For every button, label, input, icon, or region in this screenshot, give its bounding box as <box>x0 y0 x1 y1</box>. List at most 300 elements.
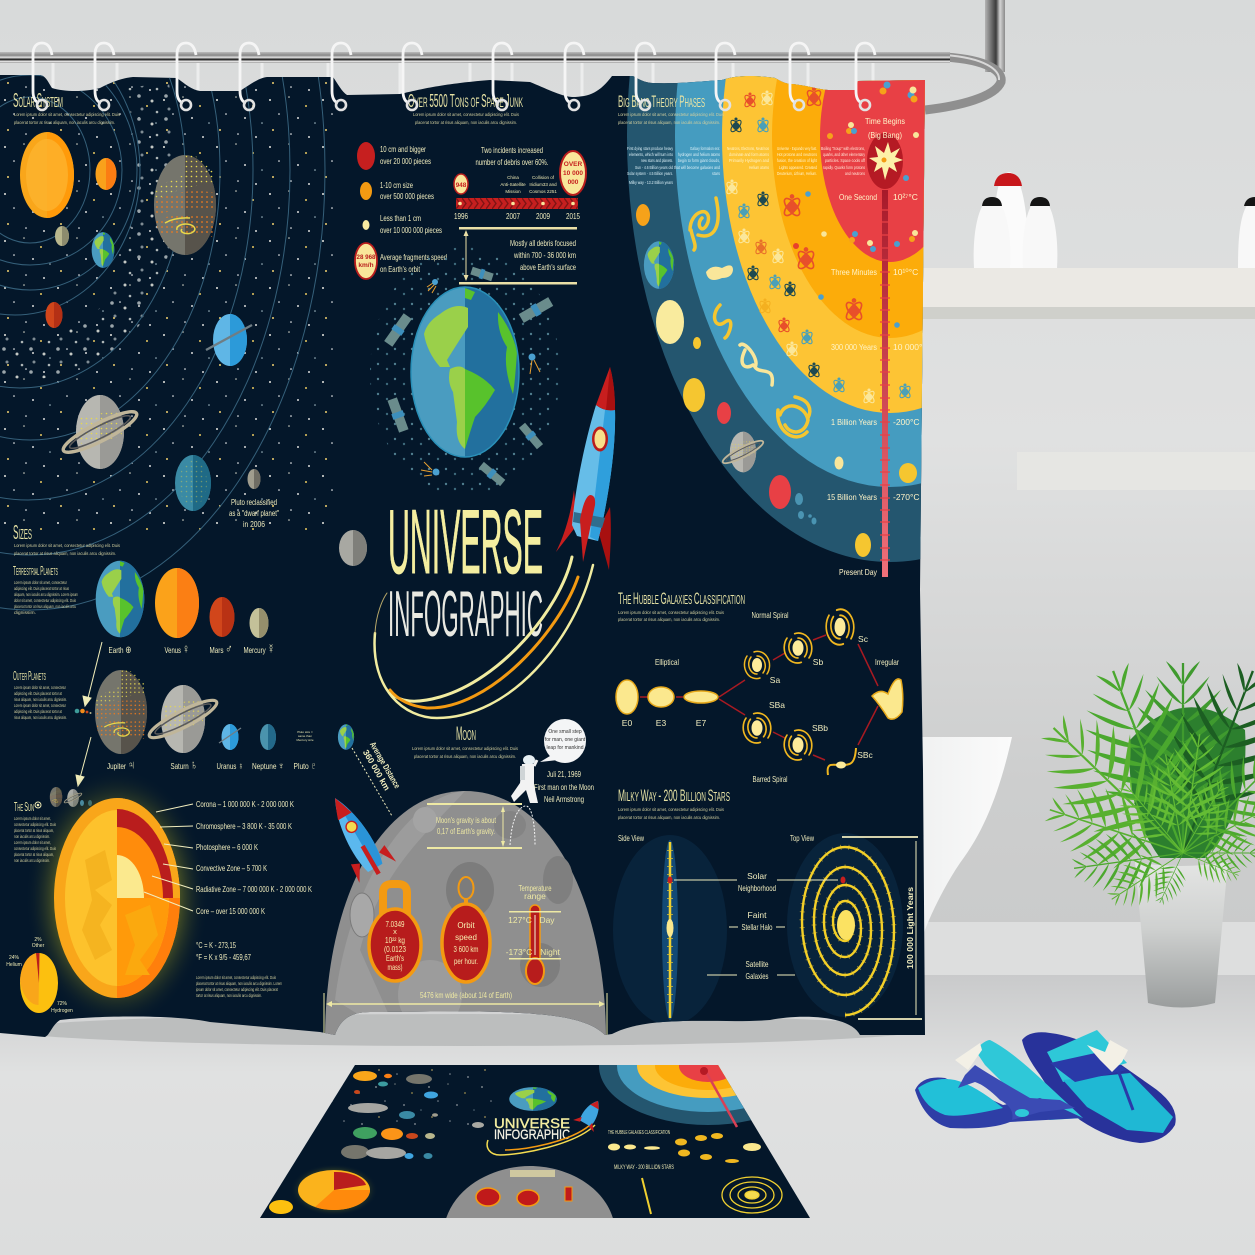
stopwatch: orbit speed <box>442 877 490 982</box>
speech bubble <box>540 719 586 763</box>
planet size: mars <box>210 597 234 637</box>
intro text: space junk: placerat tortor at risus aliquam, non iaculis arcu dignissim. <box>415 120 517 125</box>
hubble labels: E3 <box>656 718 666 728</box>
lower wall shelf <box>1017 452 1255 490</box>
badge: fragment speed: on Earth's orbit <box>380 264 420 274</box>
hubble labels: Elliptical <box>655 657 679 667</box>
timeline labels: 15 Billion Years <box>827 492 877 502</box>
debris altitude bracket: within 700 - 36 000 km <box>513 250 576 260</box>
intro text: big bang <box>618 112 725 125</box>
timeline: debris growth: 2007 <box>506 211 520 221</box>
era descriptions: Galaxy formation era: <box>690 146 720 151</box>
mat: moon <box>445 1166 614 1222</box>
leader lines: sun layers <box>144 804 193 911</box>
era descriptions: Helium atoms <box>749 165 770 170</box>
heading: the sun: THE SUN <box>14 799 34 814</box>
intro text: moon <box>412 746 519 759</box>
labels: outer planets <box>107 762 315 770</box>
concentric era rings <box>627 0 1153 562</box>
distance label: 360 000 km <box>361 748 392 793</box>
text: sun notes: ipsum dolor sit amet, consectetur adipiscing elit. Duis placerat <box>196 987 278 992</box>
pie chart: sun composition <box>20 953 58 1013</box>
badge: fragment speed: 28 968 <box>356 254 376 261</box>
planet: neptune <box>175 455 211 511</box>
text: sun notes: Lorem ipsum dolor sit amet, consectetur adipiscing elit. Duis <box>196 975 276 980</box>
era descriptions: Deuterium, Lithium, Helium. <box>777 171 817 176</box>
upper wall shelf <box>921 268 1255 319</box>
text: sun description: non iaculis arcu dignissim. <box>14 858 50 863</box>
callout: pluto reclassified <box>229 499 279 527</box>
thermometer: temperature range: Day <box>539 915 555 925</box>
moon landing caption: Juli 21, 1969 <box>547 769 581 779</box>
mat: solar system planets <box>341 1071 438 1159</box>
labels: inner planets <box>109 644 272 654</box>
callout: incidents <box>476 145 548 167</box>
formula: temperature conversion <box>196 940 251 962</box>
scale label: 100 000 Light Years <box>905 887 915 969</box>
timeline labels: 10¹⁰°C <box>893 267 918 277</box>
moon landing caption: Neil Armstrong <box>544 794 584 804</box>
intro text: solar system: placerat tortor at risus aliquam, non iaculis arcu dignissim. <box>14 120 115 125</box>
curtain hooks <box>33 43 875 110</box>
text: terrestrial planets: dolor sit amet, consectetur adipiscing elit. Duis <box>14 598 76 603</box>
intro text: hubble <box>618 610 725 622</box>
timeline: debris growth: Iridium33 and <box>529 182 557 187</box>
panel: milky way <box>613 786 922 1025</box>
labels: sun layers: Chromosphere – 3 800 K - 35 000 K <box>196 821 292 831</box>
hubble labels: E7 <box>696 718 706 728</box>
hubble labels: Barred Spiral <box>752 774 788 784</box>
planet size: venus <box>155 568 199 638</box>
planet: pluto <box>248 469 260 489</box>
distance label: Average Distance <box>368 740 403 790</box>
legend: debris sizes: Less than 1 cm <box>380 213 421 223</box>
orbit lines <box>0 75 326 610</box>
formula: temperature conversion: °F = K x 9/5 - 459,67 <box>196 952 251 962</box>
moon width scale: 5476 km wide (about 1/4 of Earth) <box>420 990 512 1000</box>
galaxy: irregular <box>872 679 903 719</box>
kettlebell: moon mass: (0.0123 <box>384 945 406 954</box>
thermometer: temperature range: range <box>524 891 546 901</box>
astronaut <box>511 755 538 803</box>
curtain tape strips <box>53 63 873 96</box>
debris altitude bracket: Mostly all debris focused <box>510 238 576 248</box>
heading: hubble: THE HUBBLE GALAXIES CLASSIFICATION <box>618 589 745 608</box>
heading: outer planets: OUTER PLANETS <box>13 668 46 683</box>
text: outer planets: Lorem ipsum dolor sit amet, consectetur <box>14 703 66 708</box>
pie labels: Hydrogen <box>51 1008 73 1014</box>
kettlebell: moon mass: x <box>393 927 397 936</box>
timeline labels: 1 Billion Years <box>831 417 877 427</box>
timeline: debris growth: 10 000 <box>563 170 583 177</box>
mat: earth and title: INFOGRAPHIC <box>494 1126 570 1142</box>
galaxy: side view <box>613 835 727 1025</box>
timeline: debris growth: China <box>507 175 519 180</box>
intro text: big bang: Lorem ipsum dolor sit amet, consectetur adipiscing elit. Duis <box>618 112 725 117</box>
note: pluto small: same than <box>298 734 312 738</box>
hubble labels: Sa <box>770 675 780 685</box>
hubble labels: SBc <box>857 750 874 760</box>
potted plant <box>1017 650 1255 1008</box>
timeline: debris growth: Cosmos 2251 <box>529 189 557 194</box>
text: outer planets: risus aliquam, non iaculis arcu dignissim. <box>14 715 67 720</box>
mat: big bang rings <box>599 1007 817 1127</box>
icon: flower ornaments <box>955 1040 1128 1072</box>
intro text: solar system <box>14 112 121 125</box>
labels: sun layers: Convective Zone – 5 700 K <box>196 863 267 873</box>
gravity callout <box>427 803 535 849</box>
labels: sun layers: Photosphere – 6 000 K <box>196 842 258 852</box>
moon landing caption: First man on the Moon <box>534 782 594 792</box>
legend: debris sizes: over 10 000 000 pieces <box>380 225 442 235</box>
labels: outer planets: Neptune ♆ <box>252 761 284 772</box>
hubble labels: SBa <box>769 700 785 710</box>
intro text: milky way: Lorem ipsum dolor sit amet, consectetur adipiscing elit. Duis <box>618 807 725 812</box>
kettlebell: moon mass: mass) <box>388 963 403 972</box>
text: sun description: consectetur adipiscing elit. Duis <box>14 822 56 827</box>
era descriptions: Boiling "Soup" with electrons, <box>821 146 865 151</box>
milky way arrows <box>674 837 922 1019</box>
debris altitude bracket: above Earth's surface <box>520 262 576 272</box>
text: outer planets: risus aliquam, non iaculis arcu dignissim. <box>14 697 67 702</box>
central earth <box>411 287 519 457</box>
kettlebell: moon mass <box>369 884 421 981</box>
badge: fragment speed: km/h <box>358 262 374 269</box>
mat: earth and title <box>472 1087 608 1155</box>
text: sun description: Lorem ipsum dolor sit amet, <box>14 816 51 821</box>
intro text: big bang: placerat tortor at risus aliquam, non iaculis arcu dignissim. <box>618 120 720 125</box>
text: terrestrial planets <box>14 580 78 615</box>
timeline labels: -200°C <box>893 417 920 427</box>
timeline: debris growth: 948 <box>456 182 467 189</box>
timeline labels: (Big Bang) <box>868 130 902 140</box>
intro text: moon: Lorem ipsum dolor sit amet, consectetur adipiscing elit. Duis <box>412 746 519 751</box>
legend: debris sizes: 1-10 cm size <box>380 180 413 190</box>
note: pluto small: Pluto size = <box>297 730 313 734</box>
panel: hubble classification <box>616 589 903 784</box>
milky way labels: Faint <box>748 910 767 920</box>
galaxies: elliptical <box>616 680 718 714</box>
labels: outer planets: Uranus ♁ <box>216 761 244 772</box>
timeline: debris growth: Mission <box>505 189 521 194</box>
text: sun description: non iaculis arcu dignissim. <box>14 834 50 839</box>
text: sun description: Lorem ipsum dolor sit amet, <box>14 840 51 845</box>
gravity callout: Moon's gravity is about <box>436 815 496 825</box>
hubble labels: Normal Spiral <box>752 610 789 620</box>
milky way labels: Galaxies <box>746 971 768 981</box>
era descriptions: Lights appeared. Created <box>779 165 817 170</box>
era descriptions: quarks, and other elementary <box>823 152 866 157</box>
bathtub <box>920 737 1012 938</box>
era descriptions: elements, which will turn into <box>629 152 673 157</box>
legend: debris sizes <box>357 142 442 235</box>
distance arrow <box>352 748 392 816</box>
planet size: earth <box>96 561 144 637</box>
intro text: milky way <box>618 807 725 820</box>
thermometer: temperature range: Temperature <box>518 883 552 893</box>
text: outer planets <box>14 685 67 720</box>
era descriptions: begin to form giant clouds, <box>678 158 720 163</box>
thermometer: temperature range: -173°C <box>506 947 532 957</box>
hubble labels: Irregular <box>875 657 899 667</box>
title: universe infographic <box>388 492 543 650</box>
atoms: nucleosynthesis and atoms eras <box>725 88 912 404</box>
curtain shadow on floor <box>10 1014 920 1046</box>
hubble labels: Sb <box>813 657 823 667</box>
era descriptions: Solar system - 4.5 Billion years. <box>627 171 673 176</box>
mat: hubble and milky way <box>608 1130 782 1214</box>
galaxies: normal spiral <box>744 609 854 679</box>
era descriptions: Neutrons, Electrons, Neutrinos <box>727 146 770 151</box>
pie labels: 24% <box>9 955 20 961</box>
pie labels <box>6 937 73 1014</box>
stopwatch: orbit speed: per hour. <box>454 957 478 966</box>
text: terrestrial planets: adipiscing elit. Duis placerat tortor at risus <box>14 586 69 591</box>
pie labels: Helium <box>6 962 22 968</box>
plant fronds <box>1017 650 1255 920</box>
kettlebell: moon mass: 10²² kg <box>385 936 405 945</box>
intro text: sizes <box>14 543 121 556</box>
planet: earth <box>92 232 114 268</box>
small rocket <box>317 788 397 884</box>
callout: pluto reclassified: Pluto reclassified <box>231 497 277 507</box>
panel: big bang phases <box>618 0 1153 577</box>
icon: sun symbol <box>35 802 41 808</box>
labels: outer planets: Saturn ♄ <box>170 757 198 772</box>
arrow: earth to solar system scale <box>83 642 102 706</box>
planet: mars <box>46 302 62 328</box>
era descriptions: particles. Space cools off <box>825 158 866 163</box>
pie labels: Other <box>32 943 45 949</box>
intro text: space junk <box>413 112 520 125</box>
timeline: debris growth: 1996 <box>454 211 468 221</box>
timeline labels: Present Day <box>839 567 878 577</box>
hubble labels: SBb <box>812 723 828 733</box>
timeline: debris growth: Collision of <box>532 175 555 180</box>
text: terrestrial planets: aliquam, non iaculis arcu dignissim. Lorem ipsum <box>14 592 78 597</box>
era descriptions: dominate and form atoms <box>729 152 770 157</box>
connecting lines <box>640 635 878 760</box>
timeline bar <box>880 190 890 577</box>
satellites <box>383 266 554 487</box>
era descriptions: Sun - 4.6 Billion years old <box>635 165 673 170</box>
era descriptions: Hot protons and neutrons <box>777 152 818 157</box>
panel: sizes <box>13 522 316 807</box>
timeline: debris growth: Anti-Satellite <box>500 182 526 187</box>
labels: inner planets: Mercury ☿ <box>244 641 274 656</box>
legend: debris sizes: 10 cm and bigger <box>380 144 426 154</box>
timeline labels: 300 000 Years <box>831 342 877 352</box>
stopwatch: orbit speed: speed <box>455 933 477 942</box>
rocket <box>556 367 615 570</box>
debris altitude bracket <box>459 227 577 284</box>
speech bubble: for man, one giant <box>545 737 586 743</box>
planet size: mercury <box>250 608 268 638</box>
planet: uranus <box>206 314 252 366</box>
milky way labels <box>618 833 815 981</box>
panel: the sun <box>6 781 312 1013</box>
planet: sun <box>20 132 74 218</box>
back ledge <box>920 922 1255 976</box>
stopwatch: orbit speed: Orbit <box>457 921 475 930</box>
flip flop: right <box>1022 1030 1176 1143</box>
planet size: uranus <box>219 724 241 750</box>
plant pot <box>1135 862 1228 1008</box>
timeline labels: -270°C <box>893 492 920 502</box>
legend: debris sizes: over 500 000 pieces <box>380 191 434 201</box>
galaxy: top view <box>787 833 903 1017</box>
shower curtain: INFOGRAPHIC <box>388 577 543 650</box>
milky way labels: Neighborhood <box>738 883 776 893</box>
hubble labels: Sc <box>858 634 869 644</box>
timeline: debris growth: OVER <box>564 161 583 168</box>
hubble labels <box>622 610 899 784</box>
intro text: sizes: placerat tortor at risus aliquam, non iaculis arcu dignissim. <box>14 551 116 556</box>
distance label <box>359 740 403 795</box>
kettlebell: moon mass: 7.0349 <box>386 920 405 929</box>
era descriptions: new stars and planets. <box>641 158 673 163</box>
era descriptions: rapidly. Quarks form protons <box>823 165 866 170</box>
kettlebell: moon mass: Earth's <box>386 954 404 963</box>
era descriptions: and neutrons <box>845 171 866 176</box>
room wall background <box>0 0 1255 980</box>
gray planet near title <box>339 530 367 566</box>
asteroid belt <box>0 85 155 358</box>
floor <box>0 975 1255 1255</box>
milky way labels: Solar <box>747 871 767 881</box>
heading: terrestrial planets: TERRESTRIAL PLANETS <box>13 563 58 578</box>
gravity callout: 0,17 of Earth's gravity. <box>437 826 495 836</box>
panel: moon <box>317 719 607 1040</box>
callout: pluto reclassified: as a "dwarf planet" <box>229 508 279 518</box>
formula: temperature conversion: °C = K - 273,15 <box>196 940 236 950</box>
timeline labels: 10 000°C <box>893 342 929 352</box>
intro text: moon: placerat tortor at risus aliquam, non iaculis arcu dignissim. <box>414 754 516 759</box>
text: sun description <box>14 816 56 863</box>
planet: venus <box>96 158 117 190</box>
sun glow <box>25 768 209 1028</box>
text: outer planets: adipiscing elit. Duis placerat tortor at <box>14 691 62 696</box>
text: sun notes: tortor at risus aliquam, non iaculis arcu dignissim. <box>196 993 262 998</box>
diagram: sun cross-section <box>54 798 180 998</box>
era descriptions: fusion, the creation of light <box>777 158 818 163</box>
legend: debris sizes: over 20 000 pieces <box>380 156 431 166</box>
intro text: hubble: Lorem ipsum dolor sit amet, consectetur adipiscing elit. Duis <box>618 610 725 615</box>
floor mat <box>250 1007 820 1225</box>
callout: pluto reclassified: in 2006 <box>243 519 265 529</box>
intro text: milky way: placerat tortor at risus aliquam, non iaculis arcu dignissim. <box>618 815 720 820</box>
text: sun notes: placerat tortor at risus aliquam, non iaculis arcu dignissim. Lorem <box>196 981 282 986</box>
planet size: neptune <box>260 724 276 750</box>
stopwatch: orbit speed: 3 600 km <box>454 945 479 954</box>
intro text: hubble: placerat tortor at risus aliquam, non iaculis arcu dignissim. <box>618 617 720 622</box>
timeline: debris growth: 000 <box>568 179 579 186</box>
era descriptions: hydrogen and helium atoms <box>678 152 721 157</box>
era descriptions: stars <box>712 171 721 176</box>
planet: jupiter <box>154 155 216 255</box>
labels: inner planets: Venus ♀ <box>164 641 190 656</box>
era descriptions <box>627 146 866 185</box>
bottles on shelf <box>974 172 1255 268</box>
text: terrestrial planets: Lorem ipsum dolor sit amet, consectetur <box>14 580 67 585</box>
speech bubble: leap for mankind <box>547 745 584 751</box>
intro text: solar system: Lorem ipsum dolor sit amet, consectetur adipiscing elit. Duis <box>14 112 121 117</box>
labels: sun layers: Core – over 15 000 000 K <box>196 906 265 916</box>
text: sun notes <box>196 975 282 998</box>
timeline labels: 10²⁷°C <box>893 192 918 202</box>
era descriptions: Milky way - 13.2 Billion years <box>629 180 674 185</box>
era descriptions: Primarily Hydrogen and <box>729 158 769 163</box>
milky way labels: Satellite <box>746 959 769 969</box>
text: terrestrial planets: dignissim. <box>14 610 36 615</box>
labels: sun layers: Corona – 1 000 000 K - 2 000 000 K <box>196 799 294 809</box>
galaxies: barred spiral <box>743 713 856 775</box>
thermometer: temperature range: Night <box>540 947 561 957</box>
note: pluto small: Mercury size <box>296 738 314 742</box>
labels: outer planets: Jupiter ♃ <box>107 757 135 772</box>
debris dots around earth <box>370 247 560 497</box>
timeline: debris growth: 2009 <box>536 211 550 221</box>
heading: big bang: BIG BANG THEORY PHASES <box>618 92 705 111</box>
intro text: space junk: Lorem ipsum dolor sit amet, consectetur adipiscing elit. Duis <box>413 112 520 117</box>
shower curtain: UNIVERSE <box>388 492 543 593</box>
milky way labels: Stellar Halo <box>742 922 773 932</box>
badge: fragment speed <box>355 243 447 279</box>
heading: space junk: OVER 5500 TONS OF SPACE JUNK <box>408 91 523 111</box>
text: sun description: placerat tortor at risus aliquam, <box>14 828 54 833</box>
panel: moon: MOON <box>456 724 476 745</box>
pie labels: 2% <box>34 937 42 943</box>
swoosh trail under title <box>375 557 593 718</box>
labels: sun layers: Radiative Zone – 7 000 000 K - 2 000 000 K <box>196 884 312 894</box>
callout: incidents: Two incidents increased <box>481 145 543 155</box>
text: sun description: consectetur adipiscing elit. Duis <box>14 846 56 851</box>
text: outer planets: Lorem ipsum dolor sit amet, consectetur <box>14 685 66 690</box>
milky way labels: Top View <box>790 833 815 843</box>
panel: space junk <box>355 91 586 497</box>
text: sun description: placerat tortor at risus aliquam, <box>14 852 54 857</box>
flip flops <box>915 1030 1176 1143</box>
shower curtain <box>0 75 925 1037</box>
labels: sun layers <box>196 799 312 916</box>
heading: milky way: MILKY WAY - 200 BILLION STARS <box>618 786 730 805</box>
hubble labels: E0 <box>622 718 632 728</box>
planet size: saturn <box>146 685 220 753</box>
thermometer: temperature range <box>506 883 561 984</box>
timeline: debris growth: 2015 <box>566 211 580 221</box>
planet: mercury <box>55 226 69 246</box>
icon: big bang burst <box>867 133 903 189</box>
era descriptions: First dying stars produce heavy <box>627 146 674 151</box>
moon width scale <box>324 990 607 1036</box>
panel: solar system <box>0 75 333 610</box>
labels: inner planets: Mars ♂ <box>210 641 232 656</box>
timeline labels <box>827 116 929 577</box>
scale icons: outer planets <box>50 787 92 807</box>
text: outer planets: adipiscing elit. Duis placerat tortor at <box>14 709 62 714</box>
particles: quark era <box>827 82 919 252</box>
timeline labels: One Second <box>839 192 877 202</box>
planets: stars and planets era <box>636 204 871 557</box>
moon surface <box>325 791 606 1040</box>
intro text: sizes: Lorem ipsum dolor sit amet, consectetur adipiscing elit. Duis <box>14 543 121 548</box>
planet: saturn <box>59 395 141 469</box>
labels: inner planets: Earth ⊕ <box>108 645 132 656</box>
badge: fragment speed: Average fragments speed <box>380 252 447 262</box>
speech bubble: One small step <box>548 729 582 735</box>
timeline: debris growth <box>454 151 586 221</box>
flip flop: left <box>915 1040 1083 1128</box>
